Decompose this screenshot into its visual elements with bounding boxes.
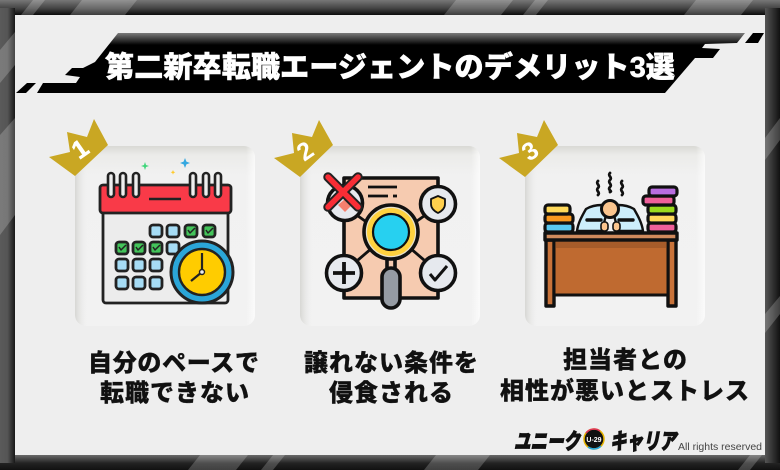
icon: document with magnifier <box>326 177 456 308</box>
logo badge U-29 <box>584 429 604 449</box>
crown badge 2: 2 <box>292 136 319 167</box>
logo badge U-29: U-29 <box>586 437 602 444</box>
icon: calendar with clock <box>100 158 233 303</box>
crown badge 3: 3 <box>517 136 544 167</box>
title text: 第二新卒転職エージェントのデメリット3選 <box>105 50 675 84</box>
crown badge 3 <box>499 120 558 177</box>
caption 1: 転職できない <box>100 380 249 407</box>
caption 1: 自分のペースで <box>88 350 259 377</box>
panel: item 3 stress <box>499 120 749 405</box>
panel: item 2 conditions <box>274 120 486 407</box>
caption 3: 担当者との <box>563 347 687 374</box>
copyright: All rights reserved <box>678 442 762 453</box>
logo wordmark left: ユニーク <box>514 429 581 454</box>
panel: item 1 schedule <box>49 119 266 407</box>
card 2 <box>300 146 480 326</box>
icon: exhausted worker at desk <box>545 173 677 306</box>
caption 2: 譲れない条件を <box>304 350 478 377</box>
crown badge 1: 1 <box>67 134 94 165</box>
title banner <box>16 33 764 93</box>
footer logo <box>514 429 762 454</box>
card 1 <box>75 146 255 326</box>
caption 3: 相性が悪いとストレス <box>500 377 749 405</box>
card 3 <box>525 146 705 326</box>
crown badge 1 <box>49 119 108 176</box>
caption 2: 侵食される <box>329 380 453 407</box>
crown badge 2 <box>274 120 333 177</box>
logo wordmark right: キャリア <box>610 429 679 454</box>
